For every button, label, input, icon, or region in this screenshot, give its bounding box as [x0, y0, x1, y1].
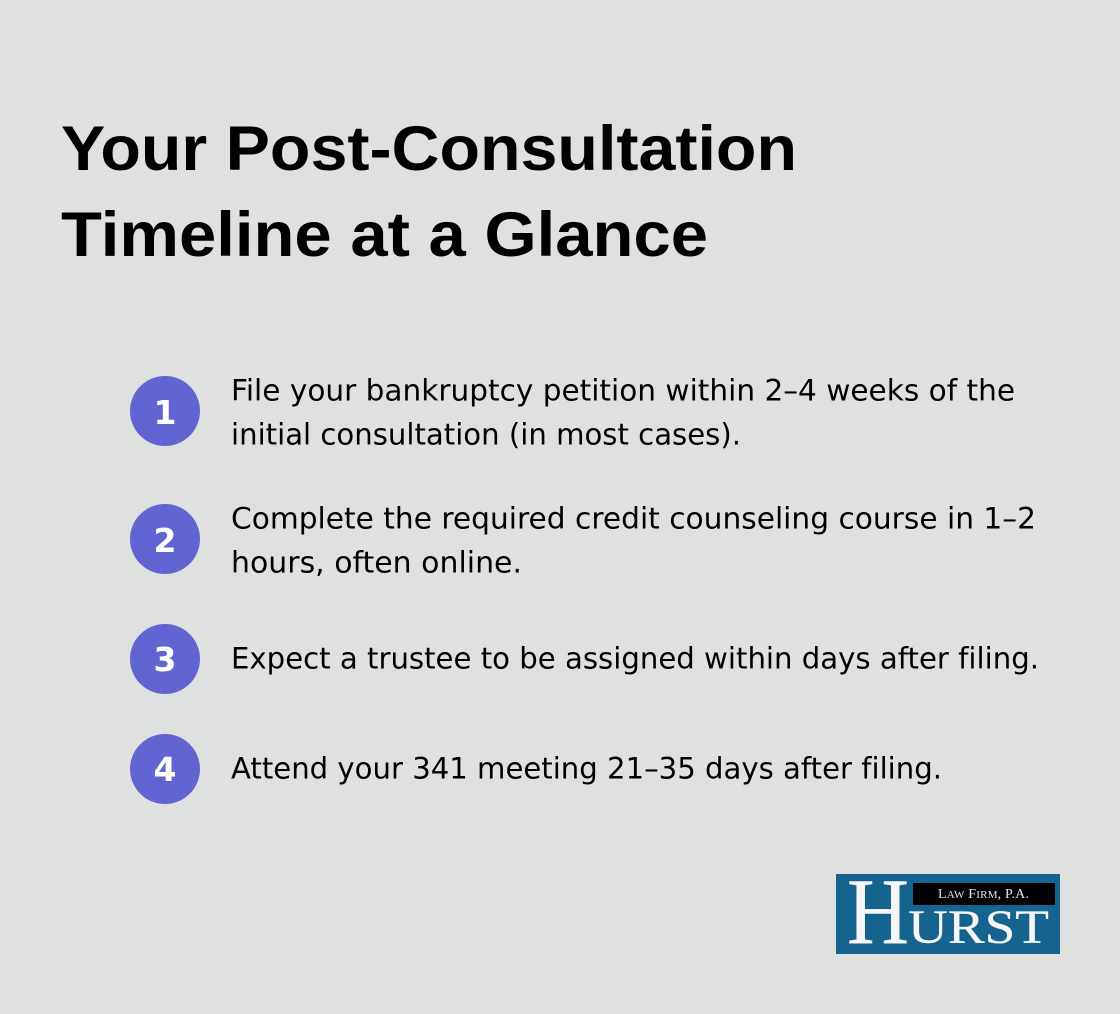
logo: Hurst Law Firm: H	[847, 860, 909, 964]
step 1: initial consultation (in most cases).	[231, 418, 741, 452]
step 3	[130, 624, 1039, 694]
logo: Hurst Law Firm: URST	[908, 901, 1049, 954]
step 2: hours, often online.	[231, 546, 522, 580]
step 1: 1	[154, 393, 176, 432]
step 3: Expect a trustee to be assigned within days after filing.	[231, 642, 1039, 676]
step 1	[130, 374, 1015, 452]
step 2: Complete the required credit counseling course in 1–2	[231, 502, 1036, 536]
step 3: 3	[154, 640, 176, 679]
step 1: File your bankruptcy petition within 2–4 weeks of the	[231, 374, 1015, 408]
step 4: 4	[154, 750, 176, 789]
title: Timeline at a Glance	[61, 200, 708, 270]
logo: Hurst Law Firm	[836, 860, 1060, 964]
title: Your Post-Consultation	[61, 114, 797, 184]
step list	[130, 374, 1039, 804]
step 4: Attend your 341 meeting 21–35 days after filing.	[231, 752, 942, 786]
step 4	[130, 734, 942, 804]
step 2: 2	[154, 521, 176, 560]
step 2	[130, 502, 1036, 580]
logo: Hurst Law Firm: LAW FIRM, P.A.	[938, 887, 1029, 902]
title	[61, 114, 797, 270]
